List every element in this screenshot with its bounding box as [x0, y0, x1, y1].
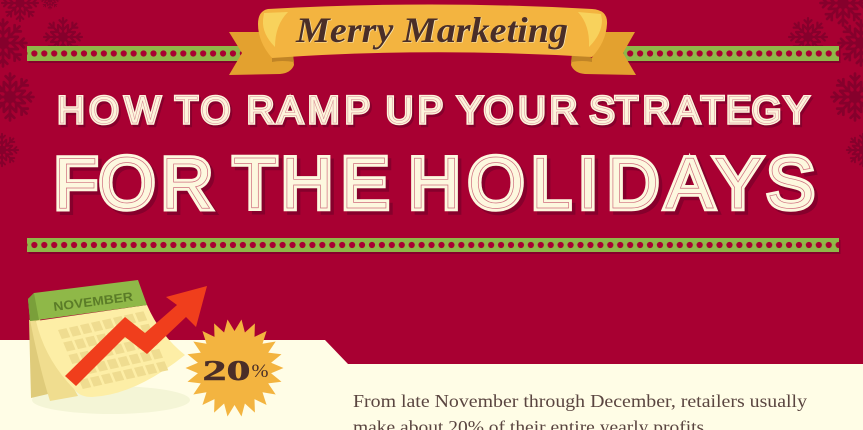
ribbon band	[258, 4, 607, 58]
calendar grid	[58, 311, 168, 389]
badge: 20% starburst	[186, 320, 284, 416]
calendar back pages	[29, 318, 48, 398]
calendar month label: NOVEMBER	[53, 290, 134, 314]
headline line 2: FOR THE HOLIDAYS	[54, 144, 815, 224]
ribbon title: Merry Marketing	[296, 11, 569, 51]
badge: 20% starburst: %	[252, 361, 269, 382]
headline line 1: HOW TO RAMP UP YOUR STRATEGY	[57, 90, 809, 132]
top green dotted bar	[27, 46, 840, 63]
headline line 1: HOW TO RAMP UP YOUR STRATEGY	[57, 90, 809, 132]
body text	[353, 391, 807, 430]
ribbon tail left	[229, 32, 294, 75]
calendar shadow	[32, 386, 190, 414]
ribbon banner	[229, 4, 636, 75]
cream content panel	[0, 340, 863, 430]
ribbon fold shadows	[272, 54, 294, 62]
calendar green header	[28, 280, 147, 321]
snowflakes left	[0, 0, 82, 166]
badge: 20% starburst: 20	[202, 355, 250, 387]
headline line 2: FOR THE HOLIDAYS	[54, 144, 815, 224]
ribbon highlights	[263, 12, 288, 47]
headline line 1: HOW TO RAMP UP YOUR STRATEGY	[59, 92, 811, 134]
ribbon banner: Merry Marketing	[295, 10, 568, 50]
icon: calendar with rising arrow	[28, 280, 207, 414]
ribbon tail right	[571, 32, 636, 75]
snowflakes right	[789, 0, 863, 166]
headline line 2: FOR THE HOLIDAYS	[57, 148, 818, 228]
calendar front page	[36, 305, 185, 397]
body text: From late November through December, retailers usually	[353, 391, 807, 411]
bottom green dotted bar	[27, 238, 840, 254]
rising arrow	[65, 286, 207, 386]
